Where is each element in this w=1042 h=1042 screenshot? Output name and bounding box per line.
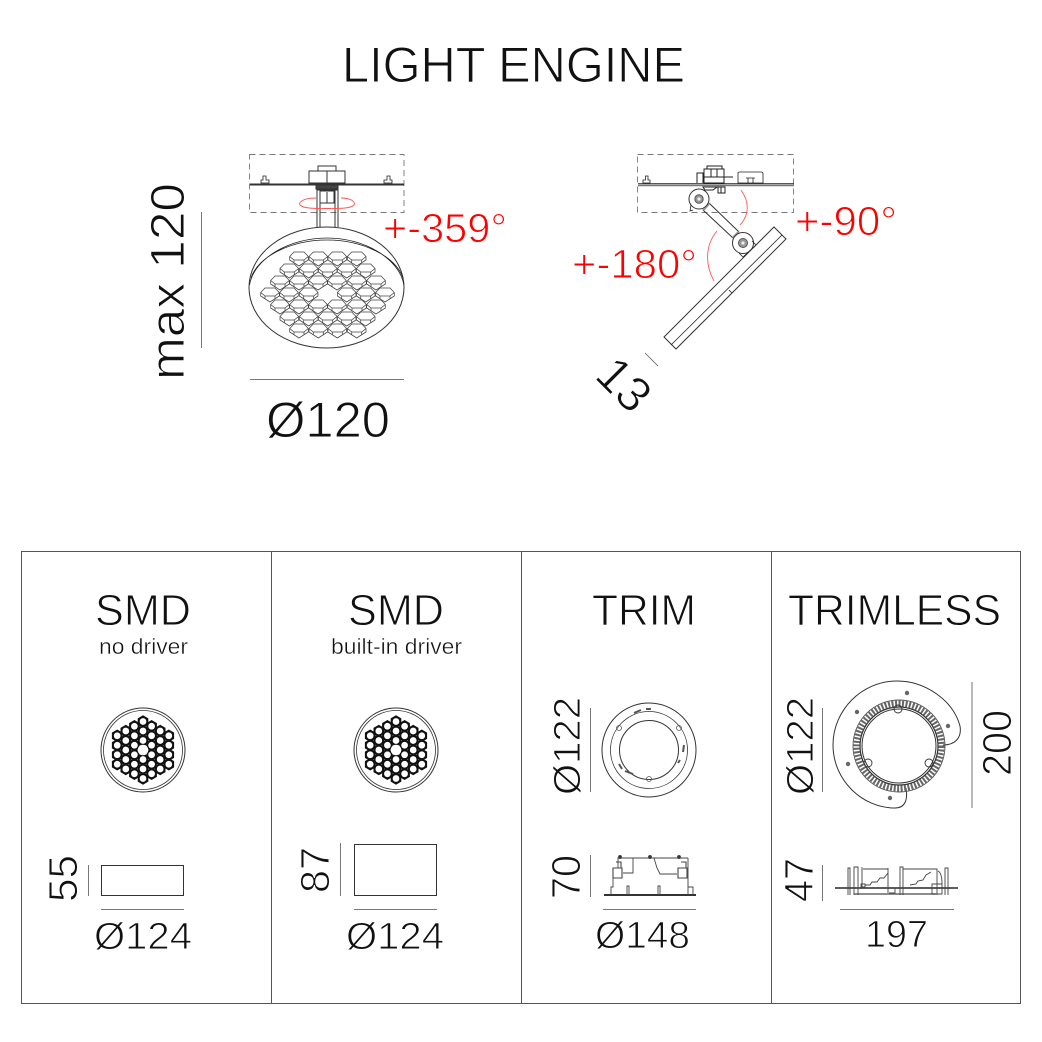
- ceiling zone dashed box: [250, 154, 404, 212]
- side view housing: [604, 856, 696, 895]
- dimension: diameter 122: Ø122: [780, 697, 822, 795]
- dimension: height 87: 87: [292, 847, 338, 893]
- dimension: height 70: 70: [543, 855, 589, 899]
- dimension: height 47: 47: [776, 858, 822, 902]
- reflector cells: [261, 252, 394, 338]
- dimension: thickness 13: 13: [585, 347, 662, 423]
- tilt arc 180: [708, 231, 717, 281]
- side view housing: [835, 867, 958, 895]
- table frame: [22, 552, 1020, 1004]
- ceiling zone dashed box: [638, 154, 794, 212]
- heading: SMD: [95, 586, 191, 635]
- icon: front view: [101, 708, 185, 792]
- dimension: diameter 122: Ø122: [547, 697, 589, 795]
- subheading: built-in driver: [331, 634, 462, 659]
- panel: TRIMLESS: [776, 586, 1020, 956]
- dimension: width 197: 197: [865, 914, 928, 956]
- dimension: diameter 124: Ø124: [346, 916, 444, 958]
- icon: front view: [354, 708, 438, 792]
- swivel arm: [703, 203, 739, 238]
- heading: TRIM: [592, 586, 696, 635]
- dimension: diameter 124: Ø124: [94, 916, 192, 958]
- lower joint: [732, 232, 756, 257]
- upper joint: [689, 189, 739, 238]
- panel: SMD no driver: [40, 586, 192, 958]
- dimension: height 200: 200: [974, 710, 1020, 776]
- title: LIGHT ENGINE: [342, 37, 685, 93]
- subheading: no driver: [99, 634, 188, 659]
- tilt arc 90: [740, 190, 747, 225]
- side view rectangle: [102, 866, 184, 896]
- panel: SMD built-in driver: [292, 586, 462, 958]
- rotation arc: [300, 198, 354, 209]
- side view rectangle: [354, 844, 436, 896]
- lamp body: [249, 227, 404, 348]
- side view luminaire drawing: [638, 154, 794, 349]
- stem: [317, 190, 338, 227]
- dimension: diameter 148: Ø148: [595, 915, 690, 957]
- icon: trimless front view: [833, 681, 960, 808]
- heading: SMD: [348, 586, 444, 635]
- tilted lamp body: [664, 227, 786, 349]
- dimension: diameter 120: Ø120: [266, 392, 390, 448]
- front view luminaire drawing: [249, 154, 404, 348]
- dimension: max 120: max 120: [142, 183, 195, 380]
- heading: TRIMLESS: [788, 586, 1001, 635]
- label: rotation 359: +-359°: [383, 205, 507, 251]
- dimension: height 200: [972, 682, 1020, 808]
- label: tilt 90: +-90°: [795, 198, 897, 244]
- mounting plate and nut: [250, 166, 404, 189]
- label: rotate 180: +-180°: [572, 241, 697, 287]
- mounting plate and components: [638, 166, 794, 193]
- dimension: width 197: [840, 910, 954, 956]
- dimension: height 55: 55: [40, 855, 86, 902]
- icon: trim front view: [602, 703, 696, 797]
- panel: TRIM: [543, 586, 696, 957]
